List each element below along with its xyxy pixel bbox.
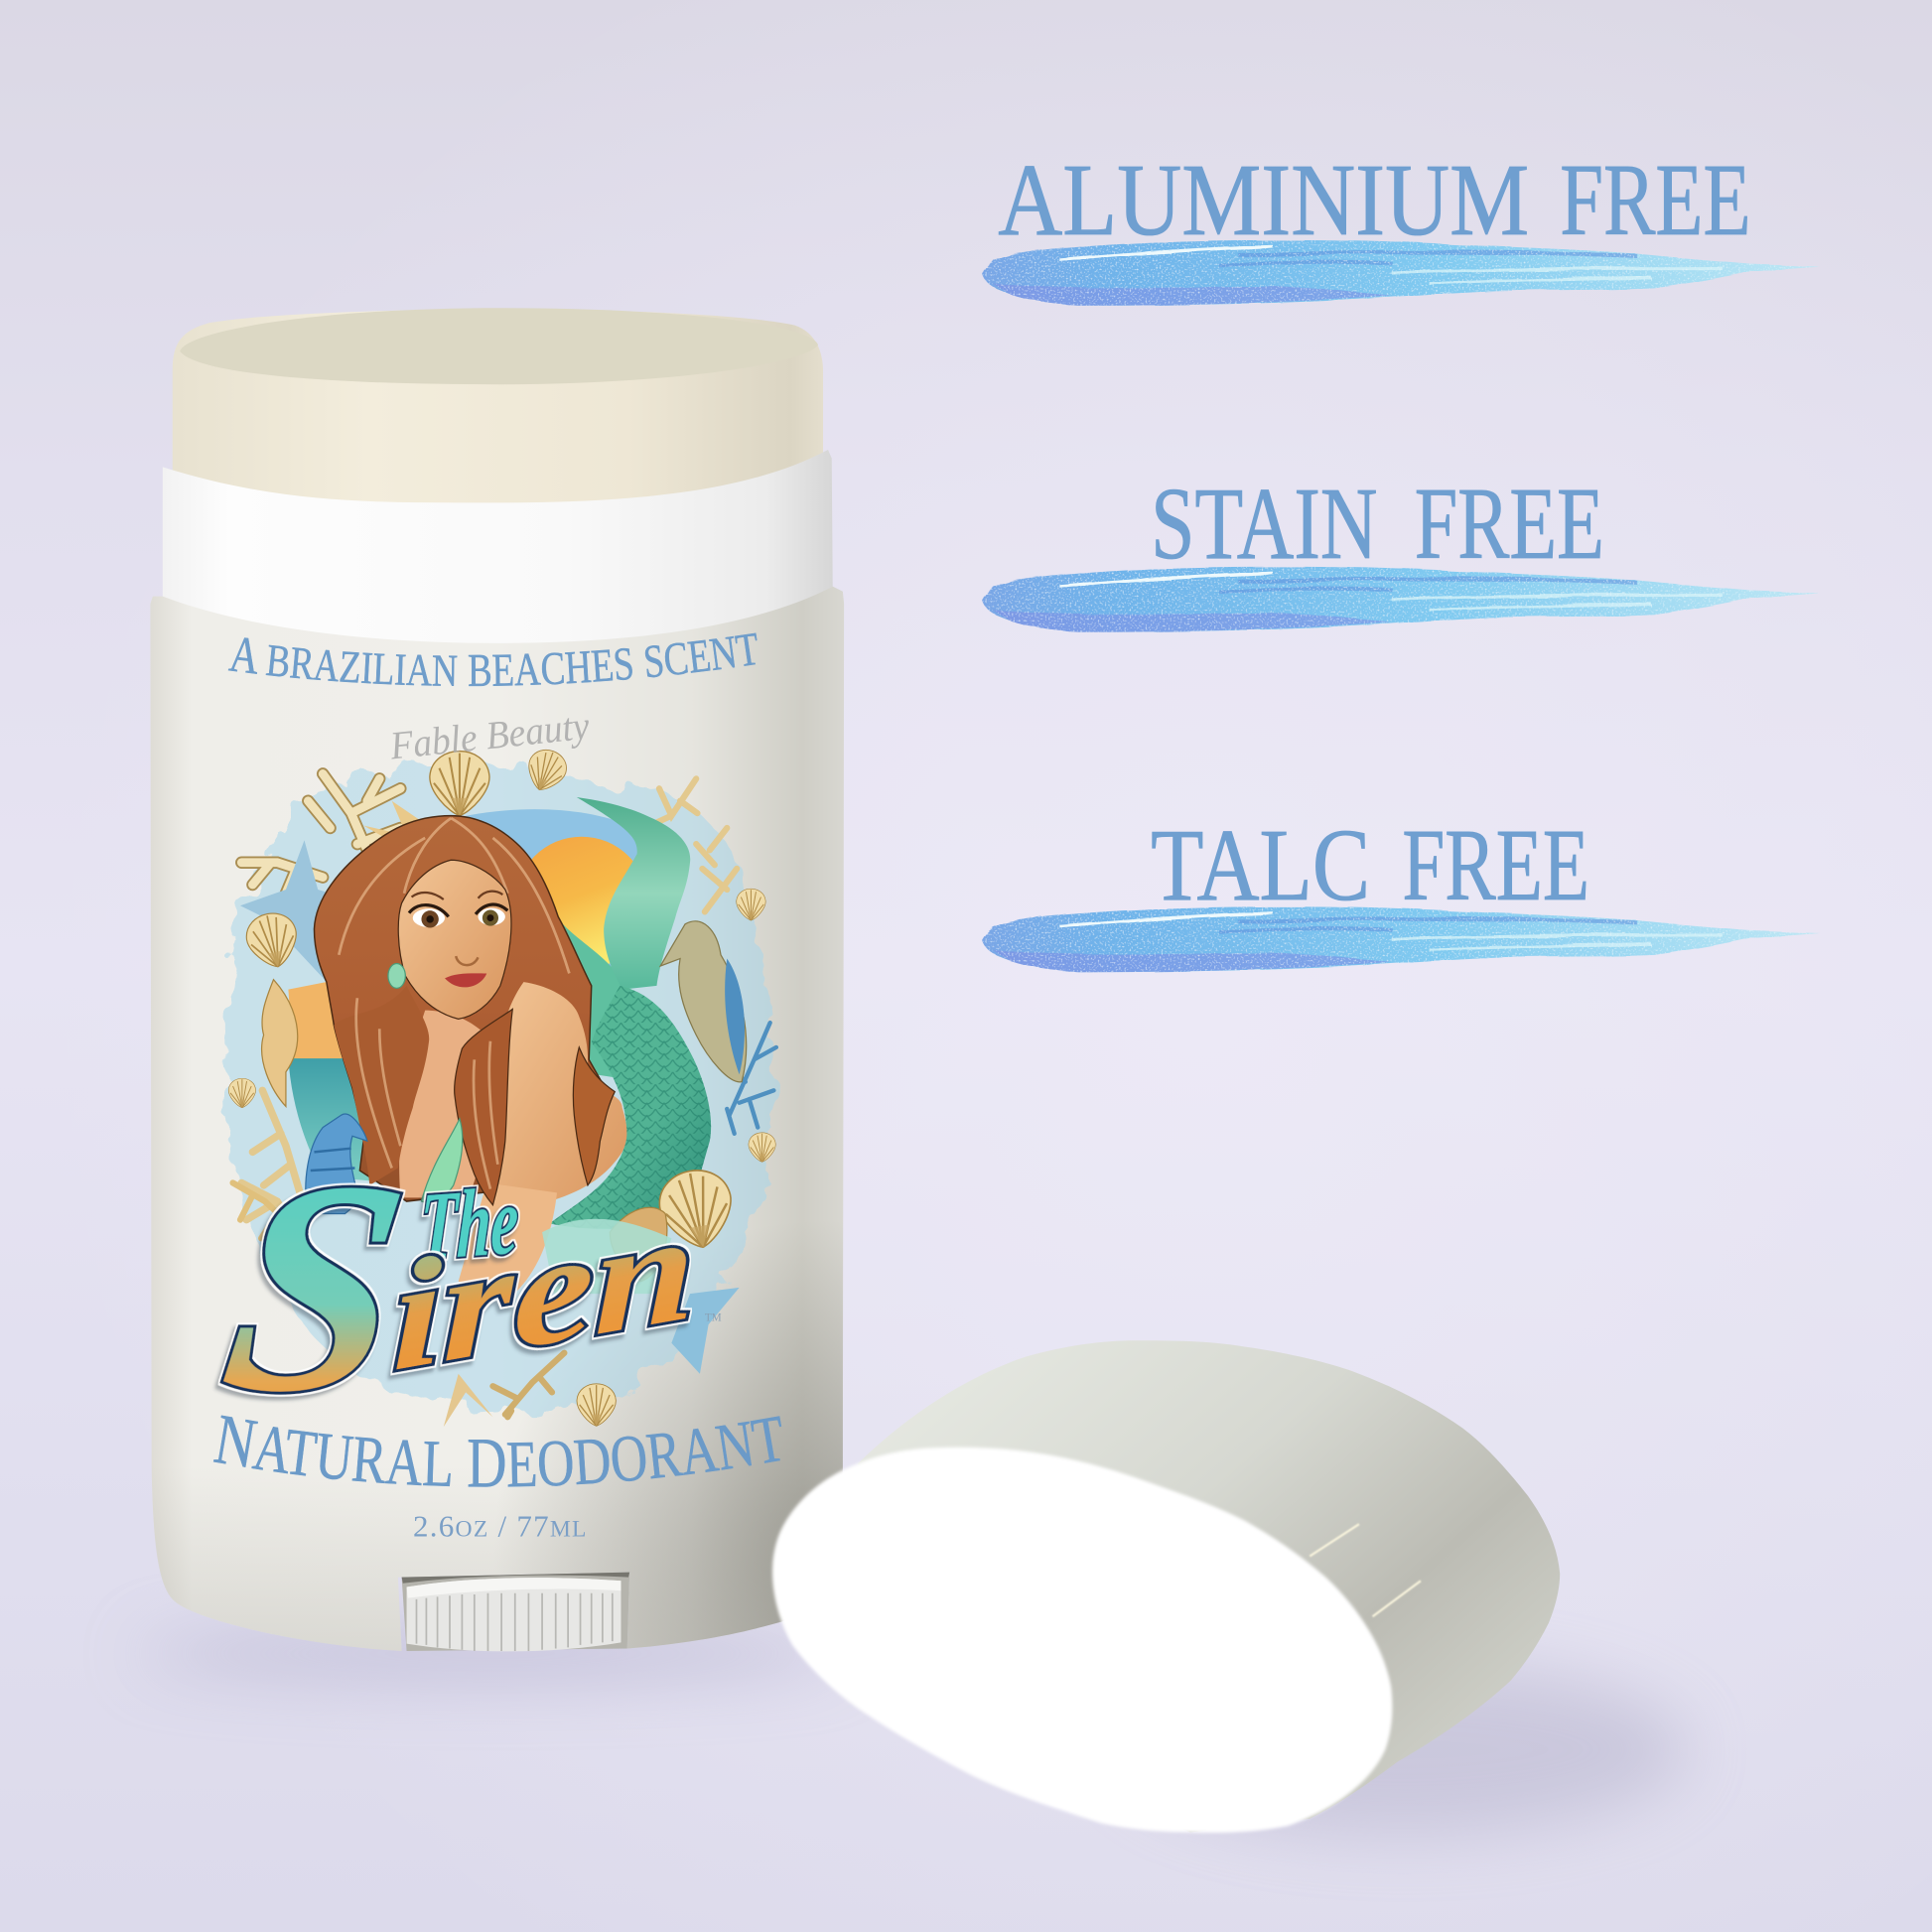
right shell mid: [749, 1133, 775, 1162]
left eye: [409, 893, 449, 928]
heading: FREE: [1402, 807, 1589, 922]
lid highlight: [1310, 1524, 1421, 1616]
conch lower right: [610, 1207, 667, 1282]
scent text: A BRAZILIAN BEACHES SCENT: [228, 633, 757, 687]
coral blue right: [727, 1023, 776, 1134]
nose: [456, 956, 479, 965]
claim 2: stain free: [982, 466, 1820, 632]
small top shell: [521, 745, 571, 796]
lid: [772, 1340, 1560, 1833]
lips: [445, 973, 486, 987]
gold coral lower: [233, 1182, 296, 1238]
earring: [388, 964, 405, 988]
lower starfish: [444, 1374, 492, 1427]
lower body skin: [488, 982, 626, 1213]
small left shell: [228, 1078, 256, 1108]
big scallop shell: [654, 1165, 739, 1253]
right hair lock: [455, 1009, 512, 1205]
brush stroke: [982, 906, 1820, 972]
label body: [150, 587, 844, 1651]
sun: [515, 837, 648, 970]
left hair lock: [334, 986, 429, 1185]
brush stroke: [982, 240, 1820, 306]
forearm: [459, 1182, 557, 1297]
coral left: [241, 773, 400, 894]
heading: FREE: [1560, 142, 1751, 257]
far right hair lock: [573, 1047, 615, 1185]
seafoam: [542, 1219, 671, 1294]
chest skin: [399, 1011, 499, 1197]
product: deodorant stick: [151, 308, 844, 1652]
conch shell: [262, 980, 298, 1106]
pale fin: [562, 923, 659, 1084]
watercolor splash: [226, 762, 774, 1411]
lower shell: [577, 1384, 616, 1426]
starfish: [240, 840, 369, 986]
logo: iren: iren: [392, 1178, 695, 1404]
lower blue star: [671, 1288, 740, 1374]
right shell top: [737, 889, 765, 920]
tail fin: [577, 797, 690, 990]
bikini: [421, 1119, 463, 1202]
logo: S: S: [207, 1120, 423, 1454]
tail body: [550, 986, 711, 1229]
sunset left: [288, 973, 369, 1059]
top scallop shell: [430, 752, 489, 815]
trademark: TM: [705, 1311, 722, 1323]
twist wheel: [402, 1573, 629, 1651]
seahorse fin: [725, 959, 745, 1074]
product name text: NATURAL DEODORANT: [212, 1416, 782, 1487]
sea: [288, 1058, 394, 1182]
claim 1: aluminium free: [982, 142, 1820, 306]
lid side: [858, 1340, 1560, 1832]
body right shading: [492, 1220, 843, 1649]
coral right: [655, 778, 737, 911]
floor shadows: [136, 1626, 1688, 1836]
face: [398, 860, 511, 1019]
heading: TALC: [1151, 807, 1370, 922]
hair back: [314, 816, 610, 1201]
lid opening face: [772, 1448, 1392, 1833]
blue seahorse: [306, 1114, 367, 1213]
logo: The: The: [418, 1166, 520, 1280]
small gold starfish: [363, 801, 419, 850]
tail scales: [550, 986, 711, 1229]
coral lower left: [241, 1090, 305, 1232]
size text: 2.6OZ / 77ML: [413, 1509, 588, 1544]
heading: ALUMINIUM: [998, 142, 1529, 257]
claim 3: talc free: [982, 807, 1820, 972]
body lower shading: [152, 1466, 843, 1651]
stick rim: [173, 310, 823, 506]
stick top face: [180, 308, 818, 384]
heading: STAIN: [1151, 466, 1378, 581]
tan seahorse: [660, 921, 747, 1082]
left scallop shell: [242, 908, 303, 972]
brand signature: Fable Beauty: [387, 704, 592, 768]
lower gold coral: [492, 1353, 564, 1417]
illustration: mermaid emblem: [207, 704, 776, 1454]
brush stroke: [982, 567, 1820, 632]
right eye: [476, 892, 507, 926]
sky: [357, 809, 653, 986]
heading: FREE: [1415, 466, 1604, 581]
hair streaks: [339, 818, 569, 1189]
inner collar: [163, 450, 833, 653]
